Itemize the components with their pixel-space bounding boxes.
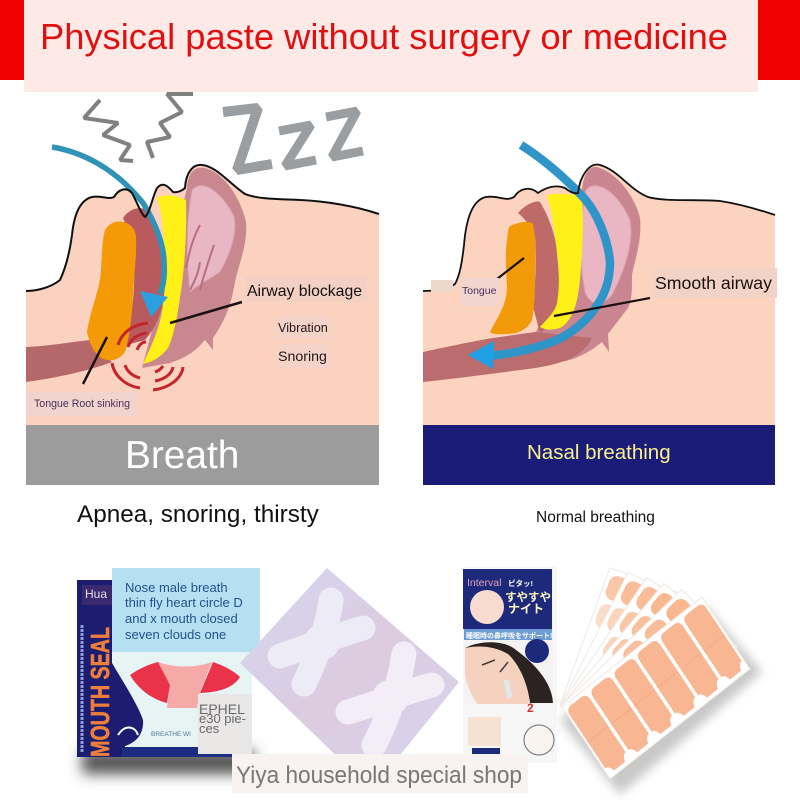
sticker: blue note: thin fly heart circle D <box>125 595 243 610</box>
title banner <box>0 0 800 92</box>
tagline: ピタッ! <box>508 578 533 588</box>
front strip card <box>562 597 750 779</box>
count tag <box>472 748 500 756</box>
head silhouette <box>26 165 379 425</box>
back strip cards <box>560 568 737 764</box>
interval label: Interval <box>467 577 501 589</box>
label: ephel: e30 pie- <box>199 711 246 726</box>
inner ear highlight <box>187 186 235 292</box>
label: ephel: ces <box>199 721 220 736</box>
vibration rings <box>112 323 183 390</box>
round inset <box>524 725 554 755</box>
sticker: blue note: and x mouth closed <box>125 611 238 626</box>
heading: nasal breathing band: Nasal breathing <box>527 441 671 464</box>
blue strip <box>464 629 552 640</box>
label: tongue root sinking <box>28 392 136 416</box>
small japanese line: 睡眠時の鼻呼吸をサポート! <box>466 631 552 640</box>
label: smooth airway <box>653 268 777 298</box>
label: ephel: EPHEL <box>199 701 245 717</box>
panel: blocked airway diagram <box>26 94 379 425</box>
sleeping face photo <box>464 640 553 704</box>
pointer lines <box>83 302 242 384</box>
sample strips <box>468 717 501 746</box>
spine small print <box>80 625 84 752</box>
tongue <box>87 222 136 360</box>
card shadow <box>560 605 762 795</box>
label: hua <box>82 585 112 605</box>
label: hua: Hua <box>85 587 107 601</box>
label: tongue <box>431 278 499 306</box>
soft palate yellow <box>143 195 186 364</box>
head silhouette <box>423 165 775 425</box>
airflow arrowhead <box>140 291 168 317</box>
label: vibration <box>277 316 330 338</box>
ear and throat tissue <box>530 167 640 362</box>
label: snoring <box>277 344 330 368</box>
head outline <box>423 165 775 291</box>
shop label: Yiya household special shop <box>236 762 522 789</box>
title banner: Physical paste without surgery or medicine <box>40 16 728 57</box>
spine title: MOUTH SEAL <box>85 627 115 757</box>
trachea <box>26 340 112 382</box>
ear streaks <box>186 225 214 290</box>
label: tongue: Tongue <box>462 285 497 297</box>
tongue <box>490 222 536 334</box>
japanese title: ナイト <box>508 602 544 616</box>
lips illustration <box>130 662 240 708</box>
small box text: BREATHE WI <box>151 731 191 738</box>
x strip two <box>348 654 432 745</box>
product: x strips sheet <box>240 568 459 790</box>
navy bottom band <box>122 747 252 757</box>
heading: nasal breathing band <box>423 425 775 485</box>
heading: breath band: Breath <box>125 434 239 477</box>
Zzz letters <box>223 108 363 170</box>
palate tissue <box>518 202 560 333</box>
product: mouth seal box <box>77 568 260 774</box>
airflow arrowhead <box>468 341 494 369</box>
palate tissue <box>123 208 165 345</box>
airflow <box>488 145 610 356</box>
pointer lines <box>497 258 650 316</box>
label: airway blockage: Airway blockage <box>247 283 362 300</box>
shop label <box>232 754 528 793</box>
label: snoring: Snoring <box>278 349 327 365</box>
product: interval box <box>463 567 557 763</box>
box face <box>463 567 557 763</box>
round badge <box>525 639 549 663</box>
box face <box>77 580 252 757</box>
label: ephel <box>198 694 252 754</box>
red note: 2 <box>527 701 534 715</box>
panel: smooth airway diagram <box>423 145 777 425</box>
sticker: blue note <box>112 568 260 652</box>
snore zigzags <box>84 94 193 161</box>
navy spine and nose <box>77 580 143 757</box>
x strip one <box>280 600 363 684</box>
japanese title: すやすや <box>505 591 551 604</box>
throat tissue <box>423 332 592 382</box>
label: tongue root sinking: Tongue Root sinking <box>34 398 130 410</box>
sticker: blue note: Nose male breath <box>125 580 228 595</box>
caption: apnea: Apnea, snoring, thirsty <box>77 501 320 528</box>
airflow <box>52 147 164 294</box>
nose outline <box>118 727 138 735</box>
product: fanned nasal strips <box>560 568 762 795</box>
head outline <box>26 165 379 291</box>
label: airway blockage <box>245 276 367 302</box>
sticker: blue note: seven clouds one <box>125 627 226 642</box>
navy header <box>463 569 552 629</box>
caption: normal breathing: Normal breathing <box>536 509 655 526</box>
round sticker <box>470 590 504 624</box>
ear and throat tissue <box>142 168 246 368</box>
japanese title <box>505 591 551 616</box>
label: smooth airway: Smooth airway <box>655 273 772 293</box>
box shadow <box>82 750 254 774</box>
inner ear highlight <box>581 186 631 303</box>
heading: breath band <box>26 425 379 485</box>
soft palate yellow <box>540 194 583 330</box>
label: vibration: Vibration <box>278 321 328 335</box>
